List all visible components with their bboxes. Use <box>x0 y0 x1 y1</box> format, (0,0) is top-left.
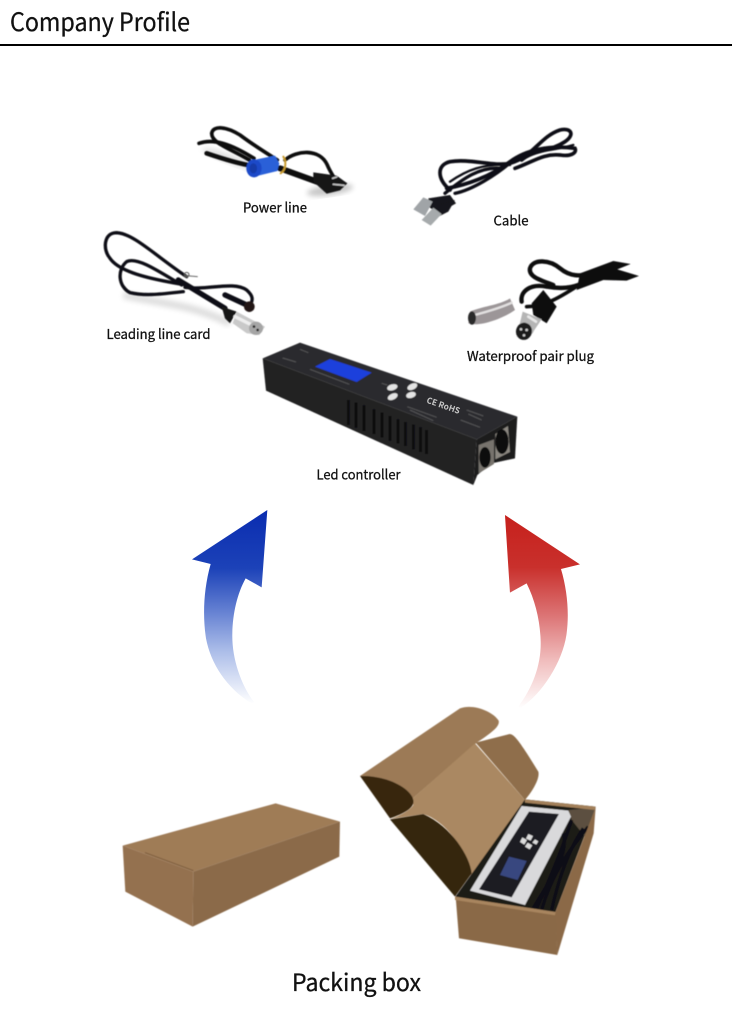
controller logo: CE RoHS <box>425 394 462 417</box>
controller vents <box>348 400 427 454</box>
label: cable: Cable <box>494 210 528 230</box>
arrow: blue curved up <box>192 510 267 703</box>
lid dark ear <box>360 776 414 818</box>
icon: network cable <box>413 129 575 226</box>
label: led controller: Led controller <box>316 464 401 484</box>
closed packing box <box>123 803 340 927</box>
lower dark side <box>390 814 472 897</box>
controller top face <box>263 343 517 439</box>
controller buttons <box>386 382 418 402</box>
lid outer flap <box>360 707 499 799</box>
label: packing box: Packing box <box>292 963 421 998</box>
XLR sockets <box>479 426 510 473</box>
icon: leading line card cable <box>105 233 265 335</box>
box right inner wall <box>568 807 596 837</box>
icon: power line cable <box>199 128 354 199</box>
controller screen in box <box>500 857 527 880</box>
closed box top <box>123 803 340 872</box>
title: Company Profile <box>10 3 190 39</box>
label: leading line card: Leading line card <box>106 323 210 343</box>
box front <box>456 897 557 955</box>
closed box front side <box>193 822 340 927</box>
cables in box <box>533 820 588 910</box>
icon: waterproof pair plug <box>468 261 639 342</box>
controller end face <box>473 417 517 485</box>
header divider <box>0 44 732 46</box>
label: power line: Power line <box>243 196 307 216</box>
box back rim <box>525 799 596 810</box>
foam insert <box>470 806 571 905</box>
icon: led controller <box>263 343 517 485</box>
label: waterproof pair plug: Waterproof pair plug <box>467 345 594 365</box>
arrow: red curved up <box>505 515 580 708</box>
controller display <box>315 359 372 382</box>
open packing box with controller <box>360 707 596 955</box>
closed box left side <box>123 846 193 927</box>
lid right ear <box>476 734 539 800</box>
controller front face <box>263 358 477 485</box>
box right side <box>555 807 596 955</box>
box inside <box>455 799 596 913</box>
lid inner panel <box>390 743 525 880</box>
controller in box <box>479 812 559 897</box>
buttons in box <box>520 834 538 849</box>
